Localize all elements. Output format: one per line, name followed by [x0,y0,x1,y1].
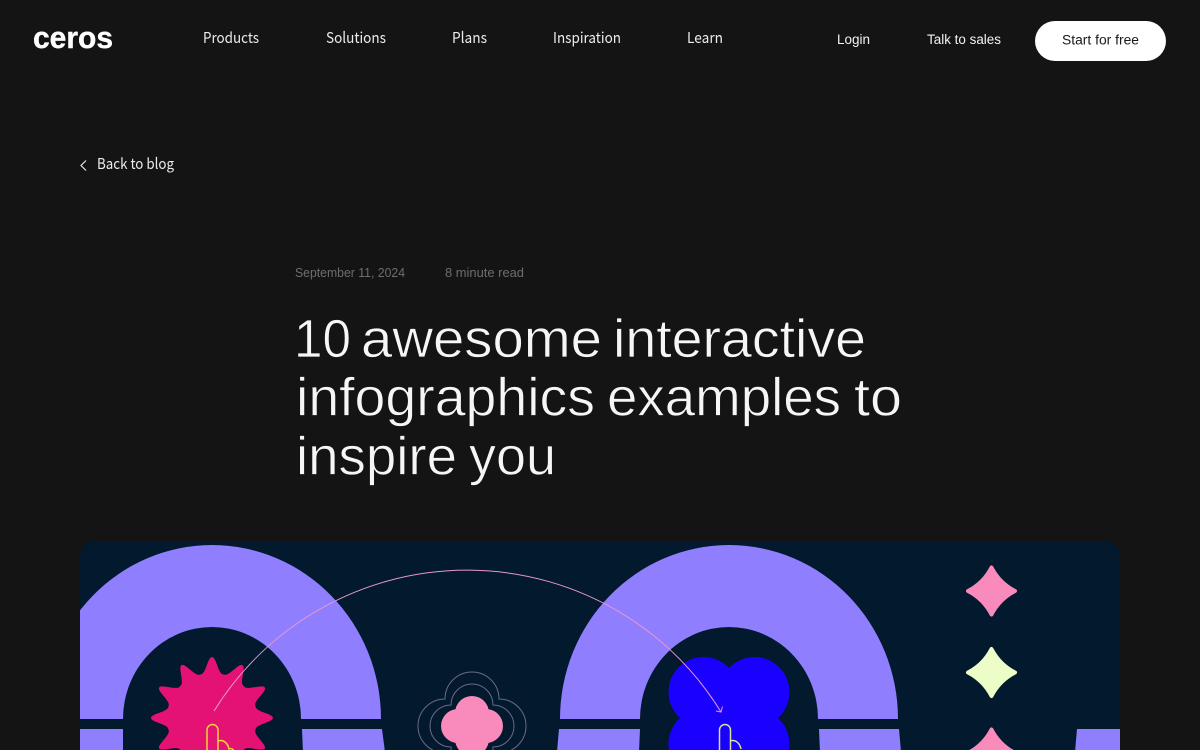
icon: chevron left [81,160,86,170]
article date: September 11, 2024 [295,265,405,280]
panel: hero illustration [43,541,1120,750]
read time: 8 minute read [445,265,524,280]
nav link: Inspiration: Inspiration [553,27,621,48]
icon: hand on blue shape [720,725,741,750]
button: Start for free: Start for free [1062,32,1139,48]
title: interactive [613,309,866,369]
icon: pink star [968,568,1015,614]
icon: pale green star [968,649,1015,696]
lower bands [80,729,1120,750]
icon: pink star lower [968,730,1015,750]
arch: left [80,545,381,719]
navigation bar [33,20,1166,61]
shape: blue quatrefoil [668,657,790,750]
title [294,309,902,486]
button: Start for free [1035,21,1166,61]
nav link: Learn: Learn [687,27,723,48]
title: examples [607,368,841,428]
icon: hand on burst [207,725,234,750]
arch: centre [560,545,898,719]
arrow: curved arc [214,570,722,712]
link: Login: Login [837,32,870,47]
logo: ceros: ceros [33,20,113,55]
back to blog link: Back to blog [97,153,174,174]
nav link: Plans: Plans [452,27,487,48]
link: Talk to sales: Talk to sales [927,32,1001,47]
title: 10 [294,309,351,369]
title: you [469,426,556,486]
shape: magenta burst [151,657,273,750]
nav link: Products: Products [203,27,259,48]
title: inspire [296,426,457,486]
title: to [854,368,902,428]
nav link: Solutions: Solutions [326,27,386,48]
shape: pink quatrefoil with outlines [418,672,526,750]
title: awesome [361,309,602,369]
title: infographics [296,368,595,428]
